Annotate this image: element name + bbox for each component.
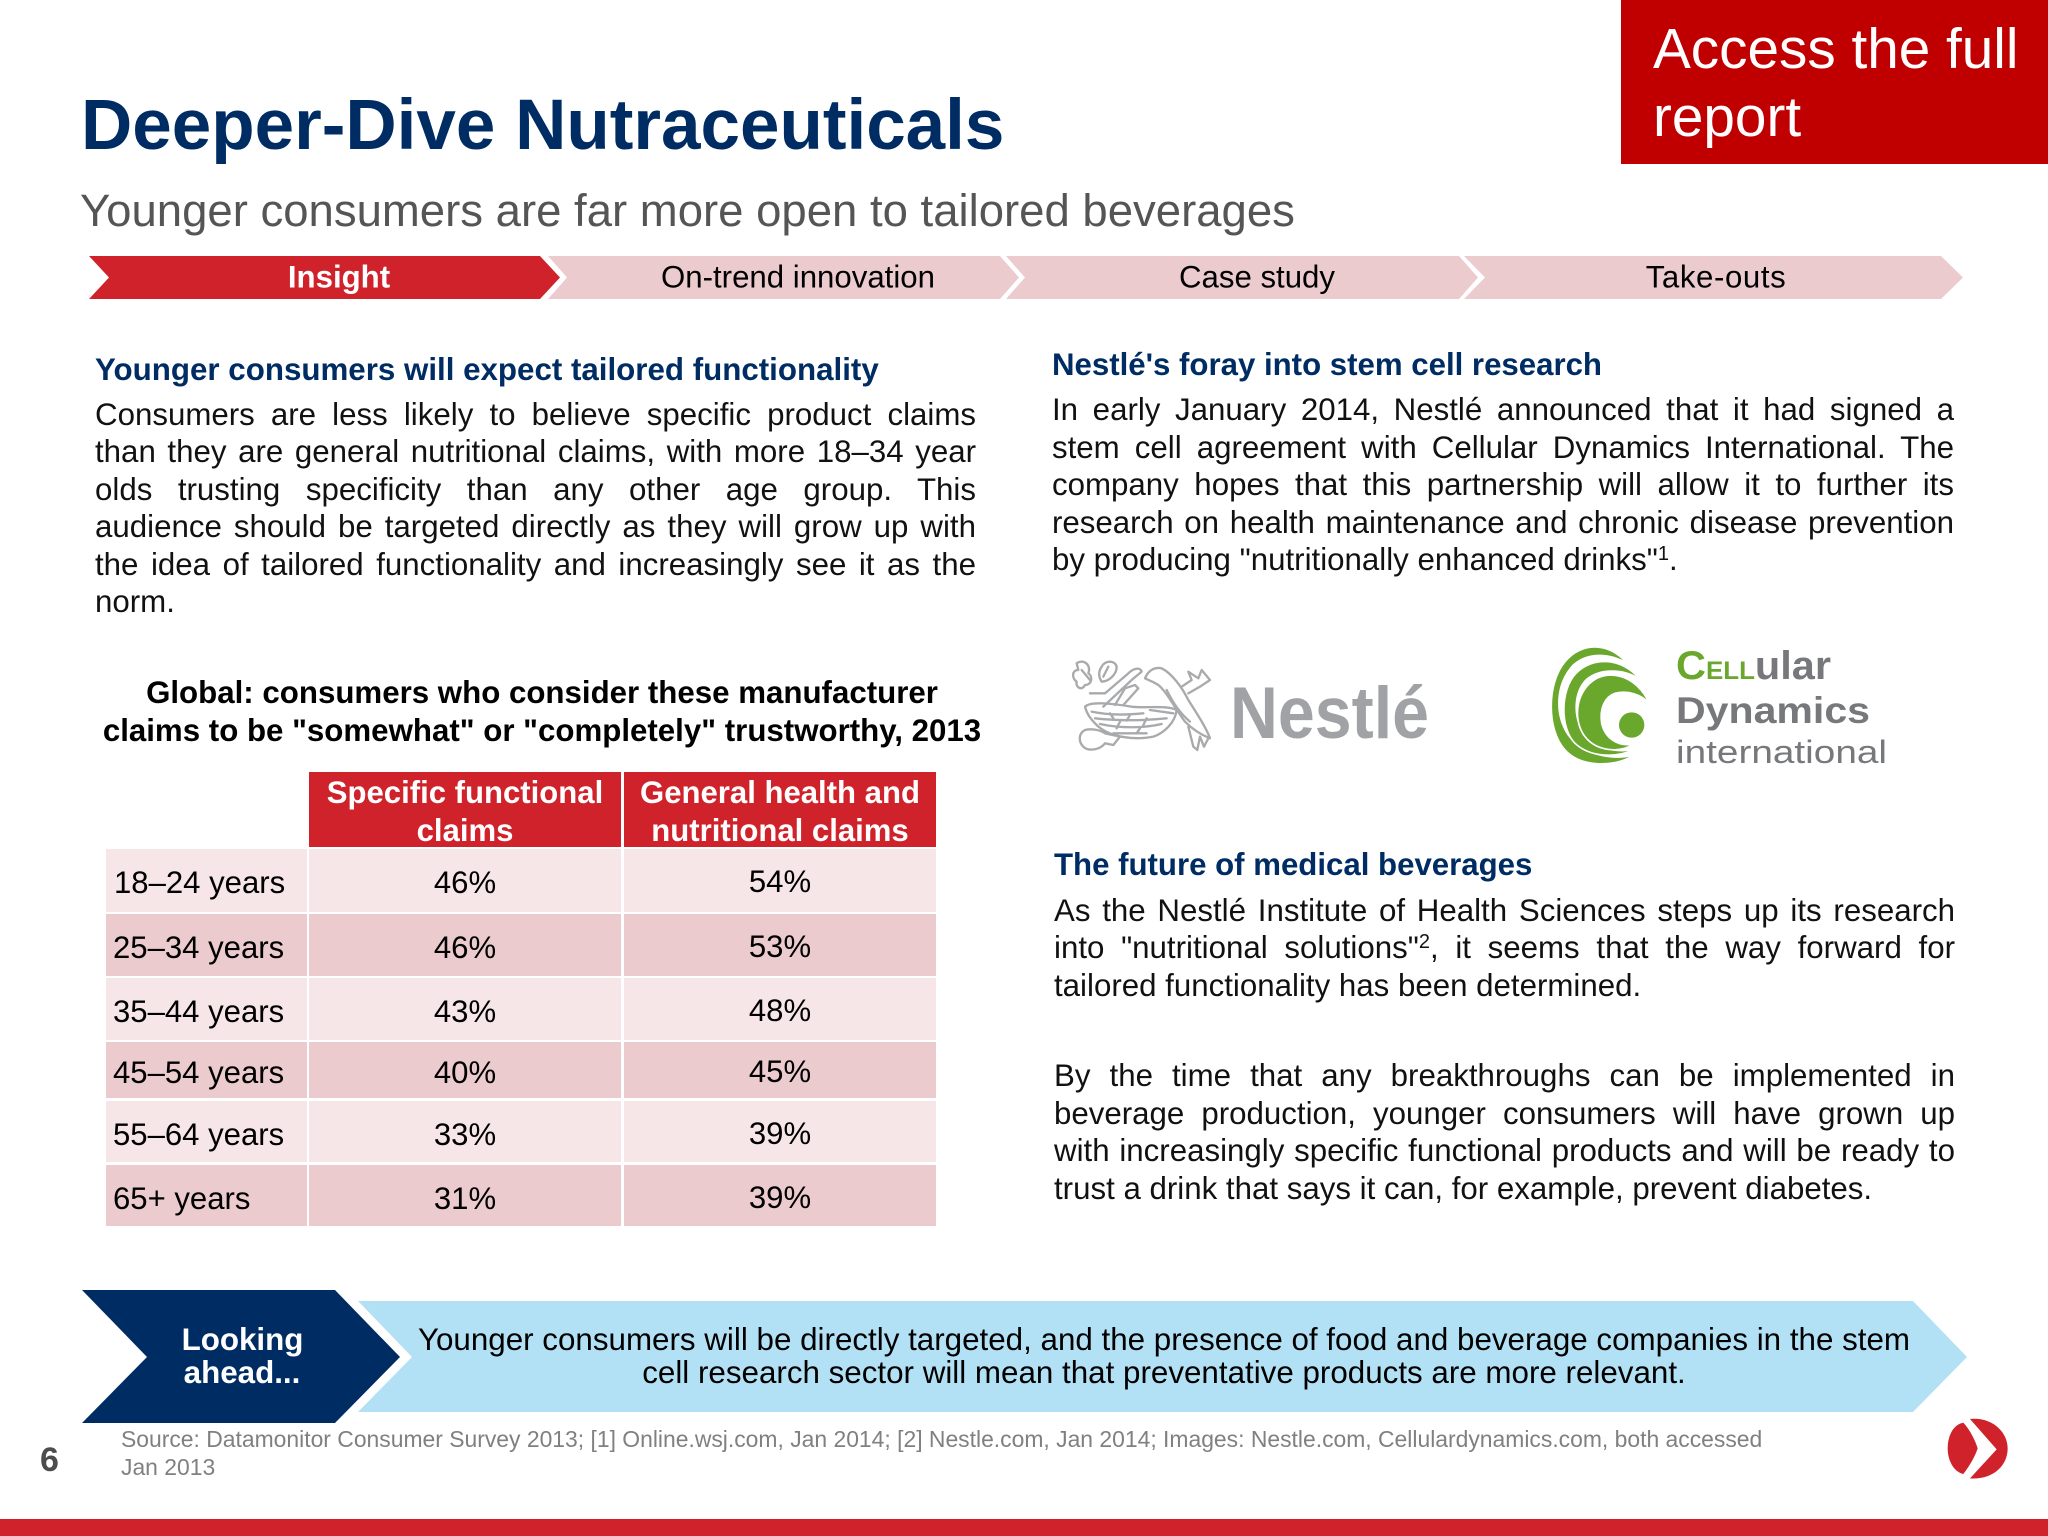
- table: trust in claims by age: [106, 772, 936, 1226]
- arrow: takeaway band: cell research sector will mean that preventative products are more relevant.: [642, 1355, 1686, 1390]
- row: 45–54 years: [106, 1042, 936, 1098]
- row: 18–24 years: 54%: [749, 864, 811, 899]
- arrow: looking ahead chevron: ahead...: [184, 1355, 300, 1390]
- row: 45–54 years: 45%: [749, 1054, 811, 1089]
- icon: green swirl: [1551, 647, 1649, 764]
- text block: stem cell agreement: by producing "nutritionally enhanced drinks"1.: [1052, 542, 1678, 577]
- chart title: Global: consumers who consider these manufacturer: [146, 675, 938, 710]
- button: access the full report: report: [1653, 86, 1801, 149]
- text block: breakthroughs: [1054, 1058, 1955, 1206]
- icon: nest and birds: [1073, 662, 1210, 750]
- header: general health and nutritional claims: General health and: [640, 774, 920, 810]
- chevron: Take-outs: Take-outs: [1646, 260, 1786, 294]
- text block: stem cell agreement: stem cell agreement with Cellular Dynamics International. The: [1052, 430, 1954, 465]
- text block: stem cell agreement: In early January 2014, Nestlé announced that it had signed a: [1052, 392, 1954, 427]
- page number: 6: [40, 1441, 59, 1479]
- source note: [121, 1426, 1762, 1480]
- wordmark: Cellular: CELLular: [1676, 644, 1831, 688]
- text block: stem cell agreement: [1052, 392, 1954, 577]
- row: 65+ years: 39%: [749, 1180, 811, 1215]
- chevron: Case study: [1006, 256, 1478, 299]
- arrow: looking ahead chevron: [82, 1290, 400, 1423]
- text block: nutritional solutions: tailored functionality has been determined.: [1054, 968, 1641, 1003]
- row: 65+ years: 31%: [434, 1181, 496, 1216]
- text block: consumer claims: audience should be targeted directly as they will grow up with: [95, 509, 976, 544]
- row: 18–24 years: [106, 849, 936, 912]
- text block: breakthroughs: trust a drink that says it can, for example, prevent diabetes.: [1054, 1171, 1872, 1206]
- callout: looking ahead: [82, 1290, 1967, 1423]
- row: 18–24 years: 18–24 years: [114, 865, 285, 900]
- row: 35–44 years: 43%: [434, 994, 496, 1029]
- chevron: On-trend innovation: On-trend innovation: [661, 260, 935, 294]
- logo: Nestlé: [1072, 660, 1429, 754]
- row: 25–34 years: 53%: [749, 929, 811, 964]
- text block: stem cell agreement: research on health maintenance and chronic disease prevention: [1052, 505, 1954, 540]
- row: 65+ years: 65+ years: [113, 1181, 250, 1216]
- chevron: On-trend innovation: [548, 256, 1019, 299]
- row: 45–54 years: 45–54 years: [113, 1055, 284, 1090]
- chart title: [103, 675, 981, 748]
- heading: tailored functionality: Younger consumers will expect tailored functionality: [95, 352, 879, 386]
- button: access the full report: [1621, 0, 2048, 164]
- source note: Jan 2013: [121, 1454, 215, 1480]
- text block: nutritional solutions: As the Nestlé Institute of Health Sciences steps up its research: [1054, 892, 1955, 928]
- wordmark: Dynamics: Dynamics: [1676, 690, 1870, 731]
- header: specific functional claims: claims: [417, 812, 513, 848]
- text block: consumer claims: olds trusting specificity than any other age group. This: [95, 472, 976, 507]
- row: 55–64 years: [106, 1101, 936, 1162]
- source note: Source: Datamonitor Consumer Survey 2013; [1] Online.wsj.com, Jan 2014; [2] Nestle.com, Jan 2014; Images: Nestle.com, Cellulardynamics.com, both accessed: [121, 1426, 1762, 1452]
- header: specific functional claims: Specific functional: [327, 774, 603, 810]
- text block: consumer claims: the idea of tailored functionality and increasingly see it as the: [95, 547, 976, 582]
- title: Deeper-Dive Nutraceuticals: [81, 86, 1004, 165]
- row: 55–64 years: 55–64 years: [113, 1117, 284, 1152]
- button: access the full report: Access the full: [1653, 18, 2018, 81]
- text block: nutritional solutions: [1054, 892, 1955, 1003]
- subtitle: Younger consumers are far more open to tailored beverages: [80, 185, 1295, 236]
- row: 18–24 years: 46%: [434, 865, 496, 900]
- row: 65+ years: [106, 1165, 936, 1226]
- text block: consumer claims: Consumers are less likely to believe specific product claims: [95, 396, 976, 432]
- footer bar: [0, 1519, 2048, 1536]
- navigation chevrons: [89, 256, 1963, 299]
- heading: future of medical beverages: The future of medical beverages: [1054, 847, 1532, 882]
- text block: breakthroughs: beverage production, younger consumers will have grown up: [1054, 1096, 1955, 1131]
- logo: Cellular Dynamics international: [1552, 644, 1887, 770]
- header: specific functional claims: [309, 772, 621, 847]
- text block: consumer claims: [95, 396, 976, 619]
- chevron: Insight: [89, 256, 560, 299]
- arrow: looking ahead chevron: Looking: [182, 1322, 303, 1357]
- text block: stem cell agreement: company hopes that this partnership will allow it to further its: [1052, 467, 1954, 502]
- row: 35–44 years: [106, 978, 936, 1040]
- chevron: Insight: Insight: [288, 260, 390, 294]
- header: general health and nutritional claims: [624, 772, 936, 847]
- text block: consumer claims: than they are general nutritional claims, with more 18–34 year: [95, 434, 976, 469]
- header: general health and nutritional claims: nutritional claims: [651, 812, 909, 848]
- text block: nutritional solutions: into "nutritional solutions"2, it seems that the way forward for: [1054, 930, 1955, 965]
- heading: stem cell research: Nestlé's foray into stem cell research: [1052, 347, 1602, 382]
- row: 25–34 years: 25–34 years: [113, 930, 284, 965]
- chevron: Take-outs: [1464, 256, 1963, 299]
- arrow: takeaway band: Younger consumers will be directly targeted, and the presence of food and beverage companies in the stem: [418, 1322, 1910, 1357]
- row: 25–34 years: [106, 914, 936, 976]
- chart title: claims to be "somewhat" or "completely" trustworthy, 2013: [103, 713, 981, 748]
- row: 45–54 years: 40%: [434, 1055, 496, 1090]
- row: 35–44 years: 48%: [749, 993, 811, 1028]
- text block: consumer claims: norm.: [95, 584, 175, 619]
- logo: red chevron mark: [1948, 1418, 2008, 1478]
- row: 55–64 years: 39%: [749, 1116, 811, 1151]
- row: 25–34 years: 46%: [434, 930, 496, 965]
- chevron: Case study: Case study: [1179, 260, 1335, 294]
- text block: breakthroughs: with increasingly specific functional products and will be ready to: [1054, 1133, 1955, 1168]
- row: 55–64 years: 33%: [434, 1117, 496, 1152]
- wordmark: international: international: [1676, 734, 1887, 770]
- row: 35–44 years: 35–44 years: [113, 994, 284, 1029]
- text block: breakthroughs: By the time that any breakthroughs can be implemented in: [1054, 1058, 1955, 1093]
- arrow: takeaway band: [358, 1301, 1967, 1412]
